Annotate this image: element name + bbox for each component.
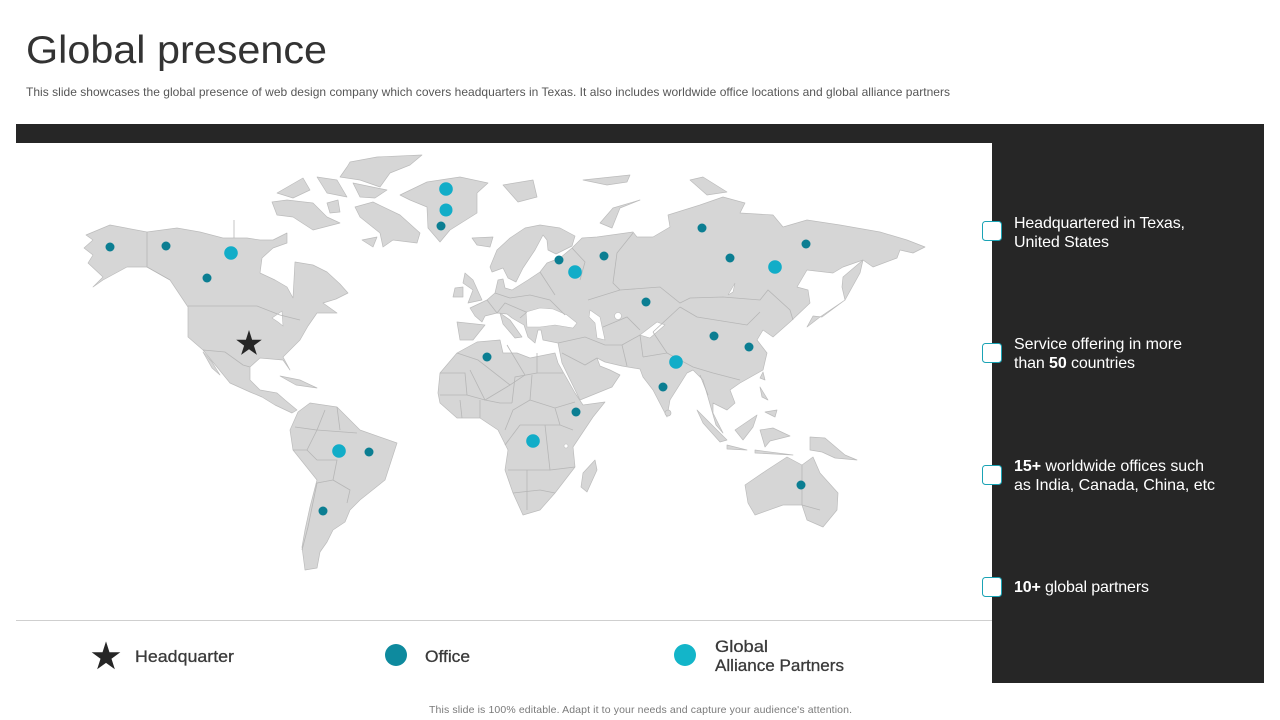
Severnaya Zemlya [690, 177, 727, 195]
legend: office [385, 644, 470, 666]
Kamchatka [842, 260, 863, 300]
Southampton Island [362, 237, 377, 247]
Spain [457, 322, 485, 340]
Arctic island [277, 178, 310, 198]
North America [84, 225, 348, 413]
Lesser Sunda [755, 450, 793, 455]
footer note: This slide is 100% editable. Adapt it to your needs and capture your audience's attention. [429, 704, 852, 716]
legend: global alliance partners [674, 637, 844, 675]
Greenland [400, 177, 488, 242]
Novaya Zemlya [600, 200, 640, 228]
Lake Balkhash area [640, 322, 665, 338]
Eurasia [470, 197, 925, 433]
Sumatra [697, 410, 727, 442]
title: Global presence [26, 29, 327, 72]
subtitle: This slide showcases the global presence of web design company which covers headquarters in Texas. It also includes worldwide office locations and global alliance partners [26, 85, 950, 99]
Sri Lanka [665, 410, 671, 416]
text: Headquartered in Texas, [1014, 215, 1185, 232]
Ellesmere Island [340, 155, 422, 187]
New Guinea [810, 437, 857, 460]
Lake Victoria [564, 444, 568, 448]
inland seas [272, 283, 735, 448]
Madagascar [581, 460, 597, 492]
text: 15+ worldwide offices such [1014, 458, 1204, 475]
Baffin Island [355, 202, 420, 247]
checkbox [982, 222, 1002, 240]
key point: global partners [982, 578, 1149, 596]
key point: service countries [982, 336, 1182, 372]
Italy [500, 313, 522, 338]
office markers [106, 222, 810, 516]
legend divider [16, 620, 992, 621]
South America [290, 403, 397, 570]
label: Headquarter [135, 647, 234, 666]
panel: top dark band [16, 124, 1264, 143]
world map [84, 155, 925, 570]
Caspian Sea [589, 310, 605, 340]
icon: office dot [385, 644, 407, 666]
checkbox [982, 344, 1002, 362]
Franz Josef Land [583, 175, 630, 185]
label: Office [425, 647, 470, 666]
Java [727, 445, 747, 450]
Philippines south [765, 410, 777, 417]
text: 10+ global partners [1014, 579, 1149, 596]
Devon Island [353, 183, 387, 198]
Sulawesi and Moluccas [760, 428, 790, 447]
key point: worldwide offices: as India, Canada, China, etc [1014, 477, 1215, 494]
key point: service countries: than 50 countries [1014, 355, 1135, 372]
country borders [147, 220, 820, 550]
legend: global alliance partners: Alliance Partners [715, 656, 844, 675]
Arctic island [317, 177, 347, 197]
Cuba [280, 376, 317, 388]
icon: partner dot [674, 644, 696, 666]
label: Global [715, 637, 768, 656]
text: Service offering in more [1014, 336, 1182, 353]
Scandinavia and Finland [490, 225, 575, 282]
Baja California [203, 352, 220, 375]
icon: star [92, 641, 120, 669]
Australia [745, 457, 838, 527]
Africa [438, 340, 605, 515]
Lake Baikal [728, 283, 735, 295]
Svalbard [503, 180, 537, 202]
Iceland [472, 237, 493, 247]
legend: headquarter [92, 641, 234, 669]
Borneo [735, 415, 757, 440]
checkbox [982, 466, 1002, 484]
Japan [807, 300, 845, 327]
key point: worldwide offices [982, 458, 1215, 494]
Great Lakes [272, 311, 283, 326]
landmasses [84, 155, 925, 570]
checkbox [982, 578, 1002, 596]
Black Sea [526, 308, 577, 328]
key point: headquarters [982, 215, 1185, 251]
key point: headquarters: United States [1014, 234, 1109, 251]
Victoria Island [272, 200, 340, 230]
panel: right dark sidebar [992, 124, 1264, 683]
global alliance partner markers [224, 182, 782, 458]
Philippines [760, 387, 768, 400]
Aral Sea [614, 312, 622, 320]
Taiwan [760, 372, 765, 380]
Arctic island [327, 200, 340, 213]
Great Britain [463, 273, 482, 303]
headquarter star on map [236, 330, 262, 355]
Ireland [453, 287, 463, 297]
